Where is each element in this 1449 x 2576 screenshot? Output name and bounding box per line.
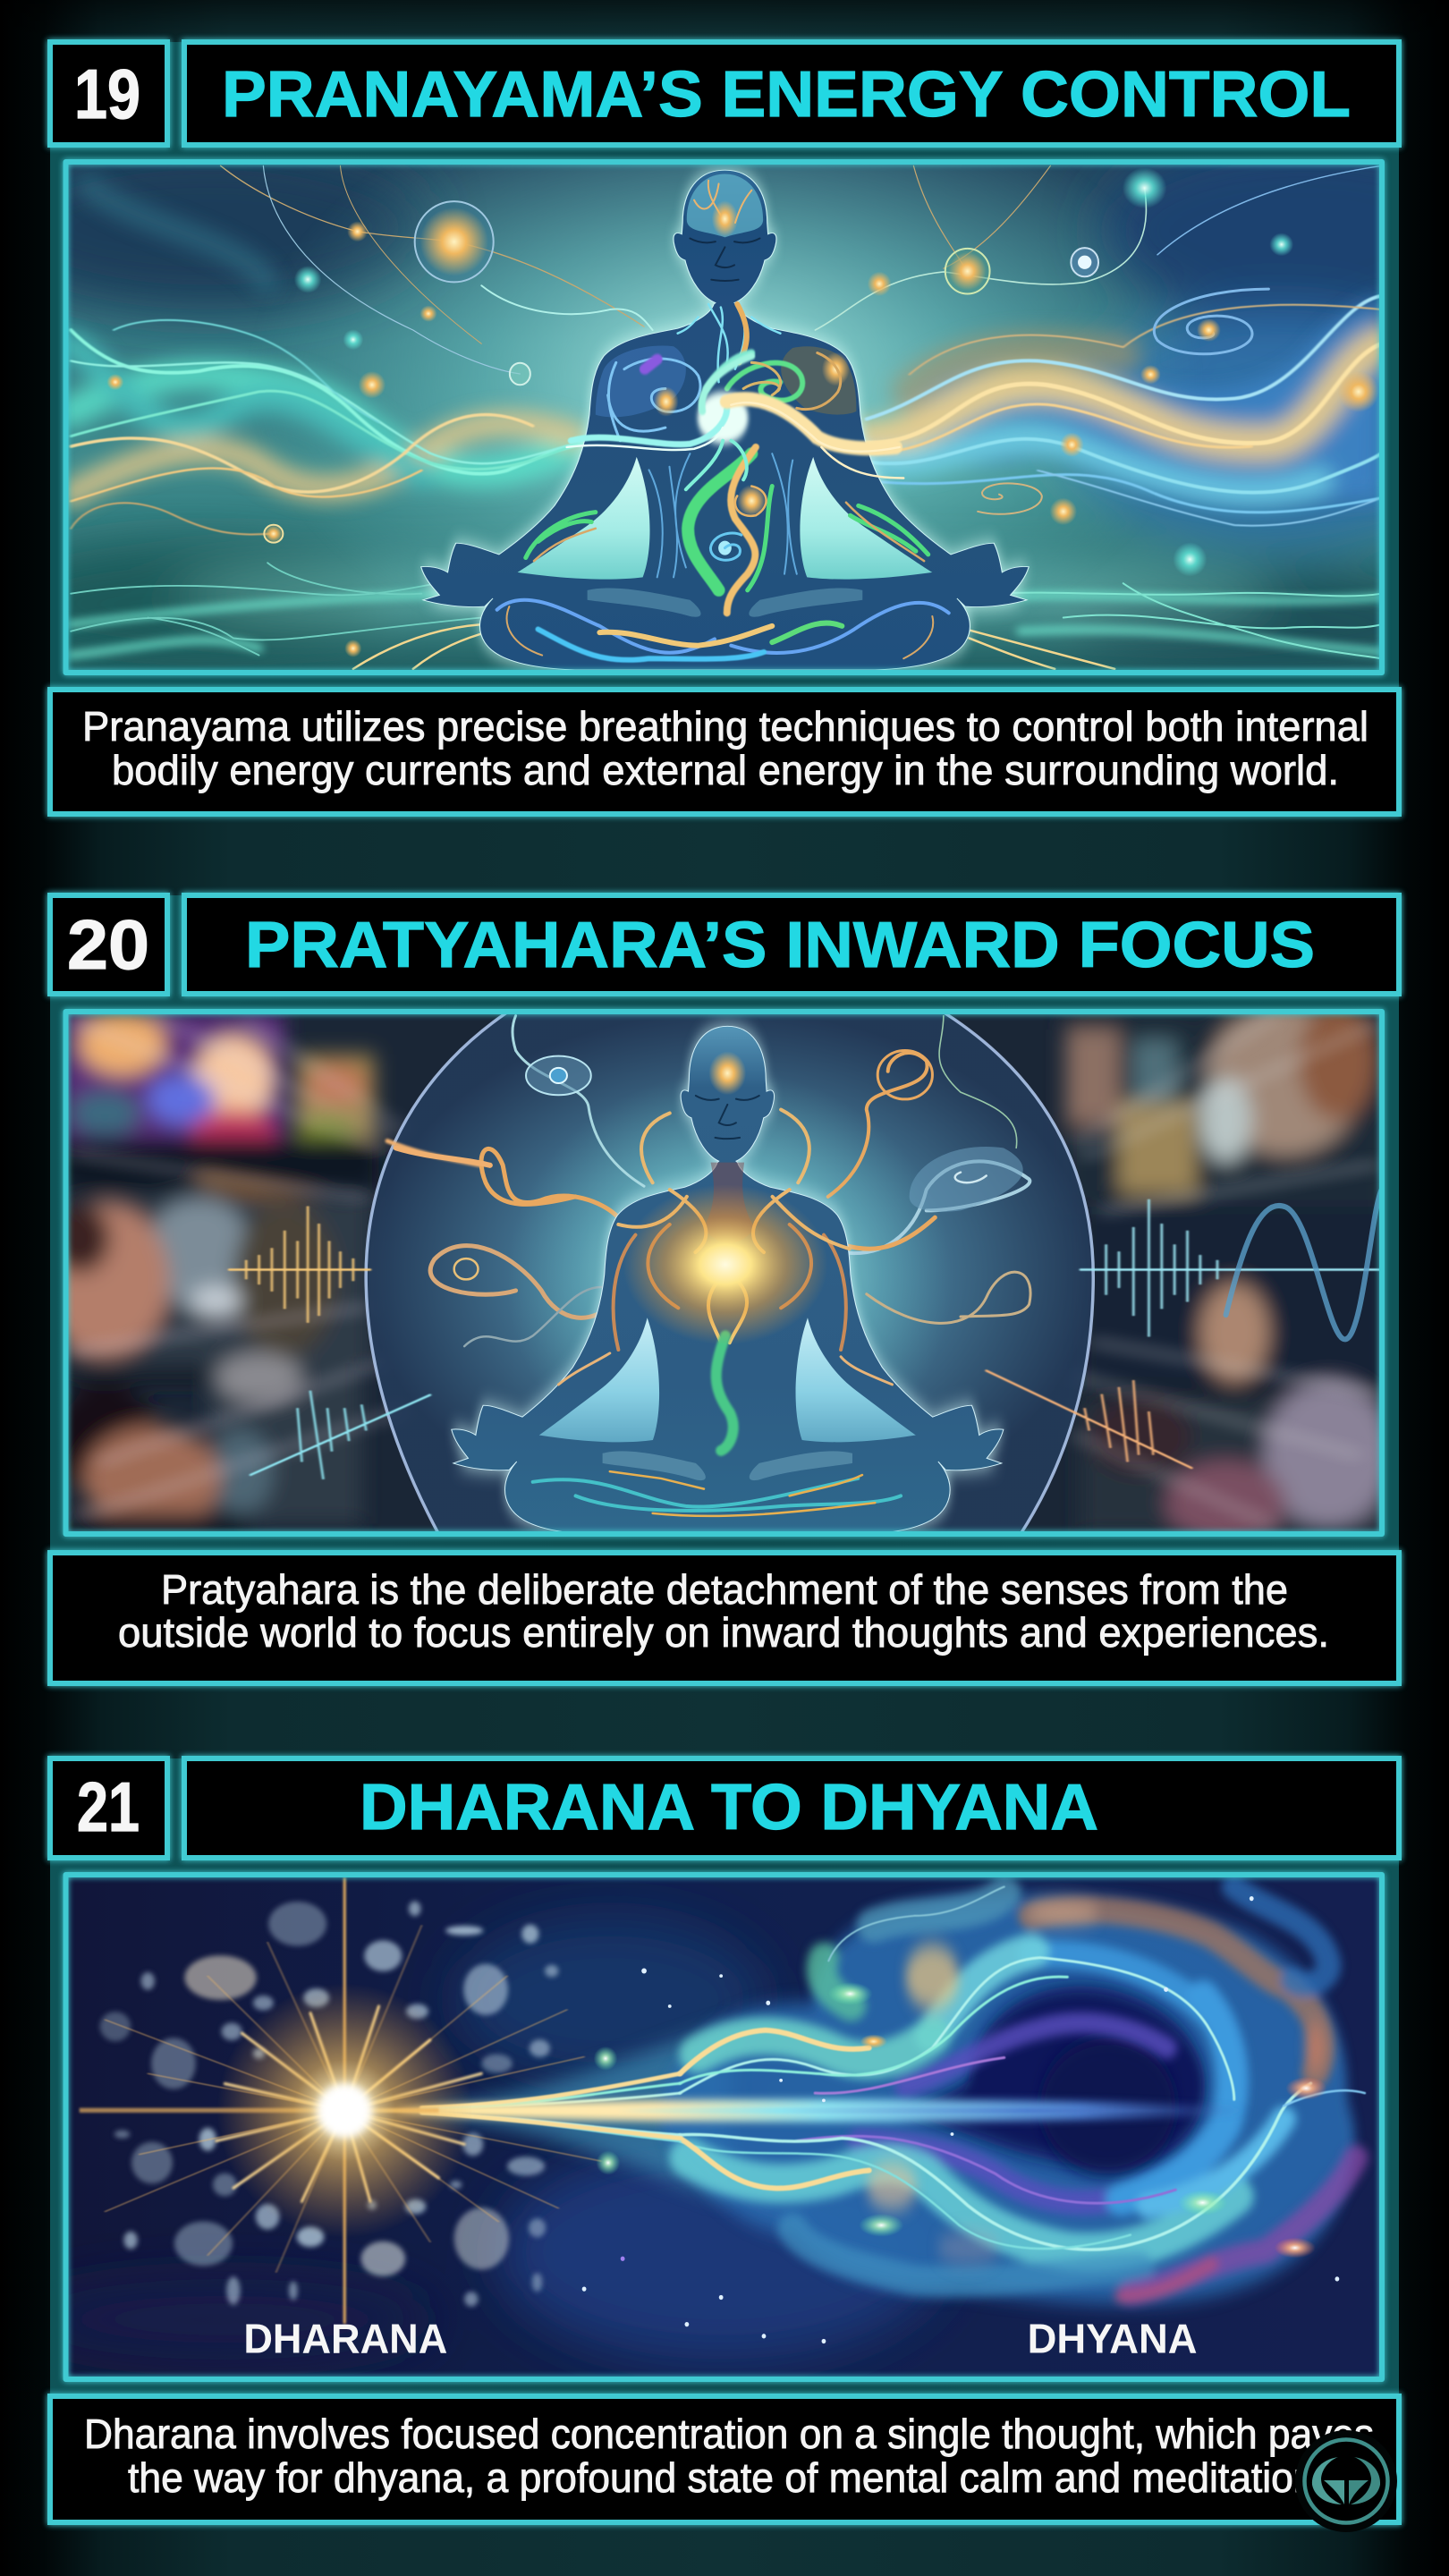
scattered thought clouds xyxy=(100,1902,558,2307)
illustration frame xyxy=(66,1875,1382,2379)
body energy currents and glowing heart xyxy=(533,1184,901,1516)
panel 20 backing xyxy=(50,895,1399,1683)
converging beam xyxy=(80,2099,1251,2122)
head and face xyxy=(687,174,763,281)
caption 19: Pranayama utilizes precise breathing techniques to control both internal xyxy=(82,703,1368,750)
panel 21 backing xyxy=(50,1758,1399,2522)
panel 21: Dharana to Dhyana xyxy=(20,1758,1399,2522)
illustration: scattered thoughts converge into a cosmic stream xyxy=(20,1875,1385,2379)
title box 21 xyxy=(184,1758,1399,1858)
neck currents xyxy=(678,304,780,382)
right wave bands xyxy=(867,296,1382,504)
blurred screens and faces, left xyxy=(41,1013,379,1538)
stream filaments joining the star to the nebula xyxy=(421,2073,680,2141)
logo badge xyxy=(1295,2430,1397,2532)
caption 21: the way for dhyana, a profound state of mental calm and meditation. xyxy=(128,2454,1326,2501)
warm nebula patches xyxy=(867,1902,1326,2264)
illustration frame xyxy=(66,1012,1382,1534)
central vortex and crossing currents xyxy=(567,356,903,489)
folded legs xyxy=(497,588,949,660)
radiant star of concentration xyxy=(105,1878,601,2323)
left wave bands xyxy=(71,186,618,495)
stars and colour sparks xyxy=(582,1896,1339,2343)
panel 19 backing xyxy=(50,42,1399,814)
label: Dharana: DHARANA xyxy=(243,2316,447,2362)
blurred screens and faces, right xyxy=(1063,1002,1393,1545)
forearm currents xyxy=(526,505,928,558)
title box 20 xyxy=(184,895,1399,994)
sound waveforms xyxy=(229,1141,1382,1479)
bright filaments xyxy=(680,1886,1365,2250)
cosmic nebula ring xyxy=(662,1886,1365,2304)
torso currents xyxy=(649,447,797,613)
title box 21: DHARANA TO DHYANA xyxy=(360,1772,1098,1843)
caption 20: outside world to focus entirely on inward thoughts and experiences. xyxy=(118,1609,1329,1656)
energy floor xyxy=(71,563,1382,669)
caption 21: Dharana involves focused concentration on a single thought, which paves xyxy=(84,2411,1374,2457)
caption 20: Pratyahara is the deliberate detachment of the senses from the xyxy=(161,1566,1288,1613)
caption 19 xyxy=(50,690,1399,814)
caption 19: bodily energy currents and external energy in the surrounding world. xyxy=(112,747,1339,793)
number box 19: 19 xyxy=(74,55,140,133)
panel 20: Pratyahara's inward focus xyxy=(41,895,1399,1683)
caption 20 xyxy=(50,1553,1399,1683)
illustration: meditating figure with energy currents xyxy=(68,165,1379,670)
spirals xyxy=(978,289,1268,514)
title box 19: PRANAYAMA’S ENERGY CONTROL xyxy=(222,59,1351,131)
title box 20: PRATYAHARA’S INWARD FOCUS xyxy=(245,910,1315,981)
meditating figure xyxy=(452,1026,1004,1534)
nebula sparks xyxy=(827,1982,1327,2258)
number box 19 xyxy=(50,42,167,145)
caption 21 xyxy=(50,2396,1399,2522)
shoulders and chest swirls xyxy=(596,346,856,441)
number box 20: 20 xyxy=(67,905,149,984)
number box 21 xyxy=(50,1758,167,1858)
protective bubble xyxy=(366,1013,1093,1534)
number box 21: 21 xyxy=(77,1767,140,1846)
panel 19: Pranayama's energy control xyxy=(0,42,1449,814)
thin background filaments and orbs xyxy=(221,165,1382,374)
stream lobes narrowing to the star xyxy=(421,2023,730,2201)
radial motion streaks xyxy=(80,1016,1371,1524)
meditating figure xyxy=(421,170,1029,670)
title box 19 xyxy=(184,42,1399,145)
illustration frame xyxy=(66,162,1382,673)
label: Dhyana: DHYANA xyxy=(1028,2316,1198,2362)
number box 20 xyxy=(50,895,167,994)
tendrils reaching to the senses xyxy=(396,1016,1030,1346)
illustration: figure in protective bubble amid blurred distractions xyxy=(41,1002,1393,1545)
